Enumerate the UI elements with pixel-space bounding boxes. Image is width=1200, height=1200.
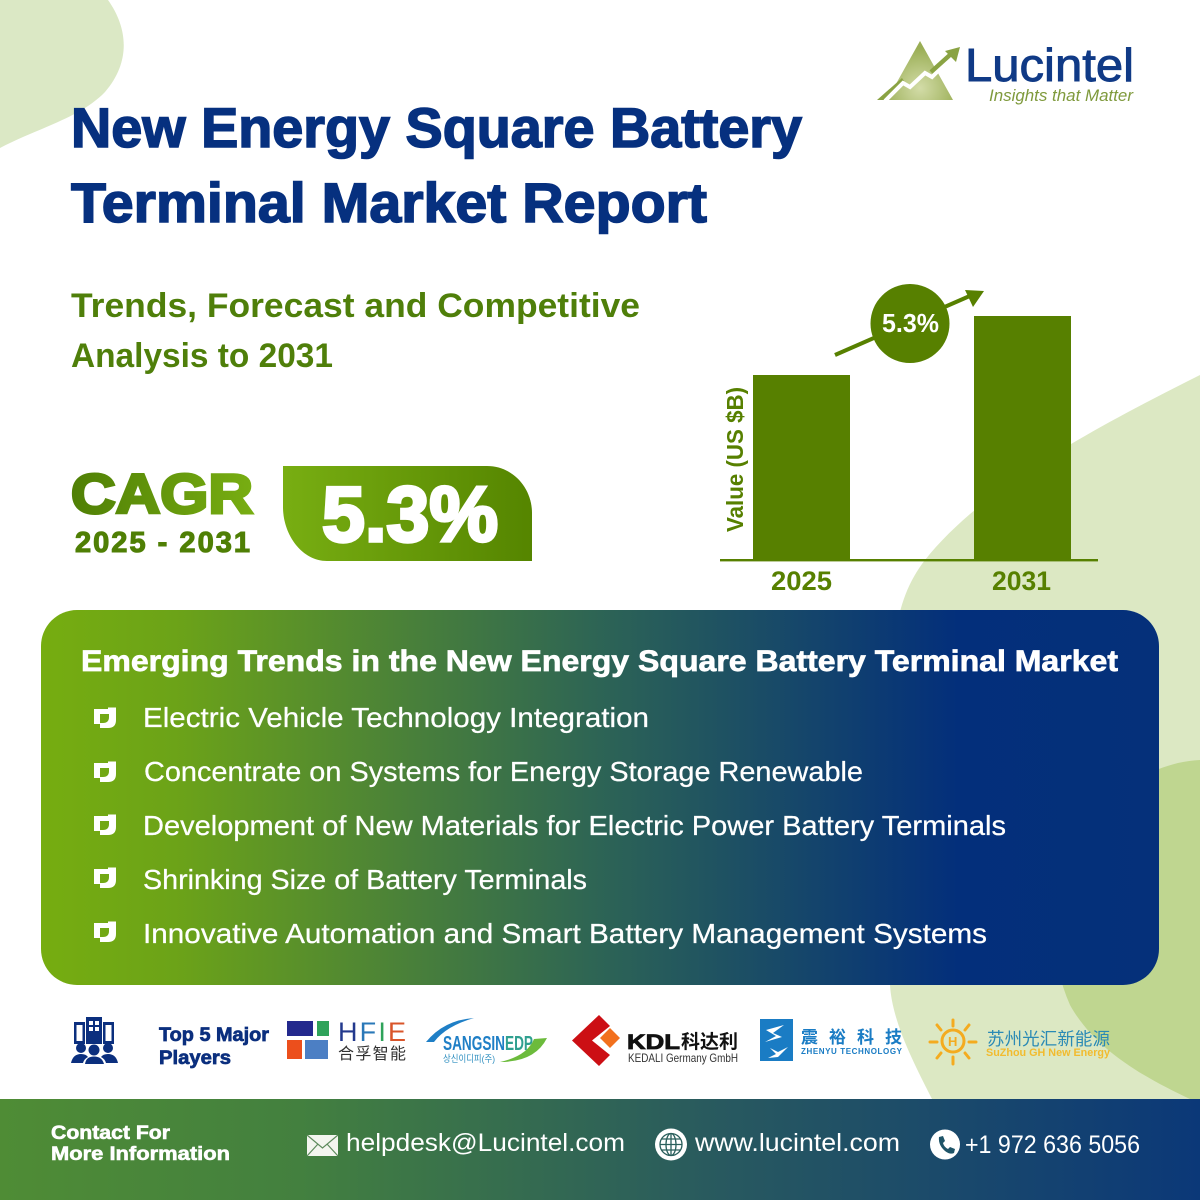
logo: Lucintel bbox=[877, 39, 1134, 105]
CAGR value pill: 5.3% bbox=[322, 470, 498, 558]
logo: SuZhou GH bbox=[930, 1020, 1111, 1064]
logo: Zhenyu bbox=[760, 1019, 903, 1061]
top players label bbox=[159, 1025, 270, 1069]
growth arrow bbox=[835, 290, 984, 355]
footer bbox=[0, 1099, 1200, 1200]
logo: KDL: 科达利 bbox=[681, 1031, 738, 1053]
trend 4: Shrinking Size of Battery Terminals bbox=[143, 864, 587, 895]
contact label bbox=[51, 1123, 230, 1165]
growth badge bbox=[870, 284, 950, 363]
label 2031: 2031 bbox=[992, 566, 1051, 596]
logo: HFIE: 合孚智能 bbox=[338, 1045, 406, 1063]
trend 3: Development of New Materials for Electric Power Battery Terminals bbox=[143, 810, 1006, 841]
subtitle bbox=[71, 287, 640, 375]
logo: Zhenyu: ZHENYU TECHNOLOGY bbox=[801, 1047, 903, 1056]
logo: Sangsin EDP: SANGSIN bbox=[443, 1033, 505, 1055]
icon: buildings and people bbox=[71, 1017, 118, 1064]
subtitle: Trends, Forecast and Competitive bbox=[71, 287, 640, 325]
logo: Zhenyu: 震裕科技 bbox=[801, 1027, 902, 1047]
CAGR label: CAGR bbox=[71, 462, 253, 525]
logo: Sangsin EDP: 상신이디피(주) bbox=[443, 1054, 495, 1065]
icon: email bbox=[307, 1135, 338, 1156]
icon: globe bbox=[655, 1128, 687, 1160]
label 2025: 2025 bbox=[771, 566, 832, 596]
top players label: Top 5 Major bbox=[159, 1025, 270, 1046]
website text: www.lucintel.com bbox=[694, 1129, 900, 1157]
CAGR label bbox=[71, 462, 253, 559]
logo: SuZhou GH: 苏州光汇新能源 bbox=[987, 1029, 1110, 1049]
trend 1: Electric Vehicle Technology Integration bbox=[143, 702, 649, 733]
logo: KDL bbox=[572, 1015, 738, 1066]
title bbox=[71, 96, 802, 234]
CAGR years: 2025 - 2031 bbox=[75, 527, 250, 559]
logo: KDL: KDL bbox=[627, 1031, 680, 1054]
contact label: More Information bbox=[51, 1144, 230, 1165]
logo: Sangsin EDP bbox=[426, 1018, 547, 1065]
CAGR value pill bbox=[283, 466, 532, 561]
panel: emerging trends bbox=[41, 610, 1159, 985]
background blob: right light bbox=[890, 375, 1200, 1099]
phone text: +1 972 636 5056 bbox=[965, 1131, 1140, 1159]
logo: HFIE bbox=[287, 1017, 406, 1063]
bar chart bbox=[720, 284, 1098, 596]
trend 5: Innovative Automation and Smart Battery Management Systems bbox=[143, 918, 987, 949]
logo: Sangsin EDP: EDP bbox=[505, 1033, 533, 1055]
email text: helpdesk@Lucintel.com bbox=[346, 1129, 625, 1157]
top players label: Players bbox=[159, 1048, 231, 1069]
growth badge: 5.3% bbox=[882, 308, 939, 338]
logo mark bbox=[877, 41, 960, 101]
icon: phone bbox=[930, 1130, 960, 1160]
bar 2025 bbox=[753, 375, 850, 560]
axis bbox=[720, 559, 1098, 561]
logo: SuZhou GH: SuZhou GH New Energy bbox=[986, 1047, 1111, 1059]
title: New Energy Square Battery bbox=[71, 96, 802, 159]
trend 2: Concentrate on Systems for Energy Storage Renewable bbox=[144, 756, 863, 787]
logo tagline: Insights that Matter bbox=[989, 86, 1134, 105]
logo: HFIE: HFIE bbox=[338, 1017, 406, 1047]
logo wordmark: Lucintel bbox=[965, 39, 1134, 91]
subtitle: Analysis to 2031 bbox=[71, 337, 333, 375]
background blob: right dark bbox=[1055, 760, 1200, 1099]
title: Terminal Market Report bbox=[71, 171, 707, 234]
panel heading: Emerging Trends in the New Energy Square Battery Terminal Market bbox=[81, 645, 1118, 678]
bar 2031 bbox=[974, 316, 1071, 560]
logo: KDL: KEDALI Germany GmbH bbox=[628, 1051, 738, 1065]
background blob: top left bbox=[0, 0, 124, 148]
logo: SuZhou GH: H bbox=[948, 1034, 957, 1049]
y axis label: Value (US $B) bbox=[722, 387, 748, 532]
contact label: Contact For bbox=[51, 1123, 171, 1144]
